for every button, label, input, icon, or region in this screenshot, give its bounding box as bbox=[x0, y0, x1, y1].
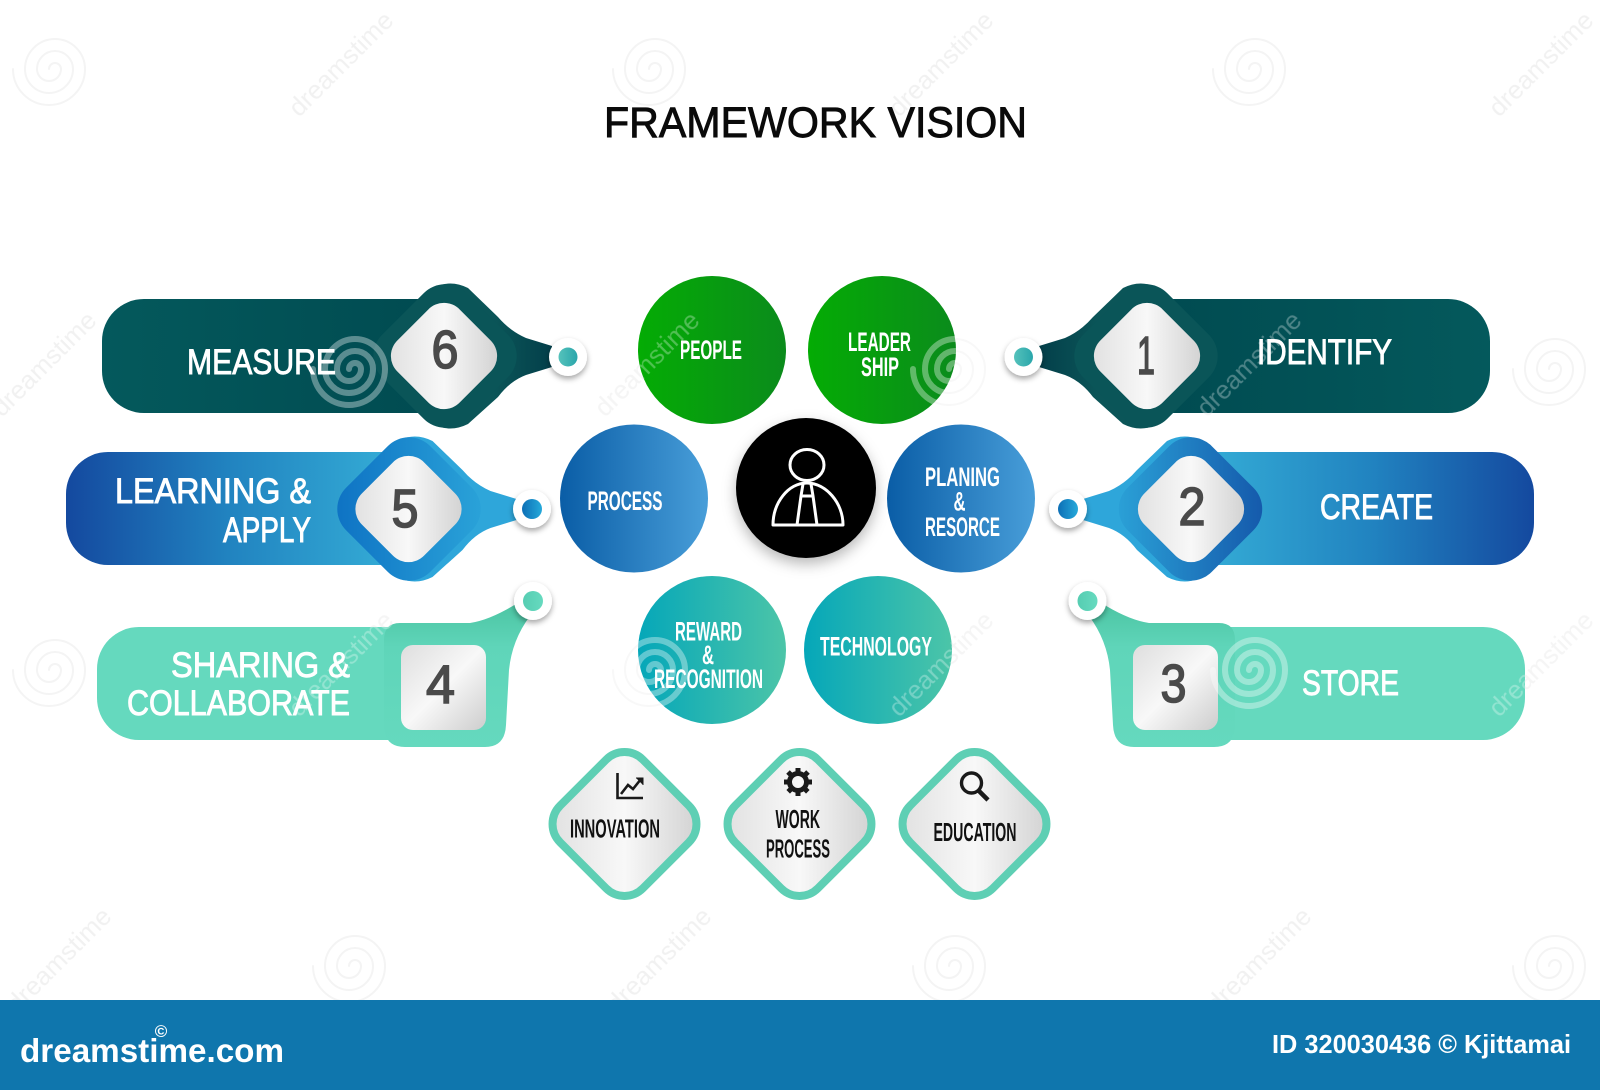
bar 4 bbox=[97, 627, 437, 740]
circle reward and recognition: REWARD bbox=[675, 616, 742, 646]
background watermark: dreamstime bbox=[600, 901, 717, 1018]
label innovation: INNOVATION bbox=[570, 814, 660, 844]
diamond 1 bbox=[1085, 294, 1209, 418]
circle planing and resorce bbox=[887, 424, 1035, 572]
background watermark: dreamstime bbox=[882, 5, 999, 122]
label work: WORK bbox=[776, 804, 820, 834]
diamond frame 6 bbox=[361, 272, 529, 440]
diamond frame 2 bbox=[1106, 425, 1275, 593]
node 2 bbox=[1049, 490, 1087, 528]
tail 5 bbox=[386, 436, 516, 582]
node 4 bbox=[514, 582, 552, 620]
node 5 bbox=[513, 490, 551, 528]
bar 3 bbox=[1185, 627, 1525, 740]
background watermark: dreamstime bbox=[282, 5, 399, 122]
tag 3 bbox=[1089, 604, 1235, 747]
diamond frame 1 bbox=[1062, 272, 1230, 440]
footer credit: ID 320030436 © Kjittamai bbox=[1272, 1029, 1571, 1059]
label identify: IDENTIFY bbox=[1257, 333, 1392, 372]
bar 1 bbox=[1130, 299, 1490, 413]
node 6 bbox=[549, 338, 587, 376]
title: FRAMEWORK VISION bbox=[604, 99, 1027, 147]
label learning: LEARNING & bbox=[115, 472, 311, 511]
circle technology: TECHNOLOGY bbox=[820, 632, 932, 662]
panel: step 5 learning and apply bbox=[66, 425, 551, 593]
diamond 6 bbox=[382, 294, 506, 418]
label education: EDUCATION bbox=[934, 817, 1016, 847]
square 3 bbox=[1133, 645, 1218, 730]
diamond education bbox=[892, 741, 1057, 907]
circle people bbox=[638, 276, 786, 424]
number 1: 1 bbox=[1137, 326, 1155, 386]
background watermark: dreamstime bbox=[588, 305, 705, 422]
panel: step 1 identify bbox=[1004, 272, 1490, 440]
background watermark: dreamstime bbox=[1482, 605, 1599, 722]
panel: step 6 measure bbox=[102, 272, 587, 440]
background watermark: dreamstime bbox=[882, 605, 999, 722]
footer logo: dreamstime.com bbox=[20, 1032, 284, 1069]
center black circle bbox=[736, 418, 876, 558]
footer logo mark: © bbox=[155, 1022, 168, 1041]
label sharing: SHARING & bbox=[171, 646, 350, 685]
number 4: 4 bbox=[426, 655, 455, 715]
square 4 bbox=[401, 645, 486, 730]
label measure: MEASURE bbox=[187, 343, 336, 382]
circle planing and resorce: & bbox=[954, 486, 966, 516]
icon: magnifier bbox=[962, 773, 988, 800]
diamond 5 bbox=[346, 447, 471, 571]
tail 1 bbox=[1039, 284, 1169, 428]
circle planing and resorce: PLANING bbox=[925, 462, 1000, 492]
footer bar bbox=[0, 1000, 1600, 1090]
background watermark: dreamstime bbox=[1200, 901, 1317, 1018]
circle process: PROCESS bbox=[588, 486, 662, 516]
background watermark: dreamstime bbox=[0, 901, 117, 1018]
number 6: 6 bbox=[432, 320, 458, 380]
icon: person with tie bbox=[773, 450, 843, 525]
label apply: APPLY bbox=[223, 511, 311, 550]
label process: PROCESS bbox=[766, 834, 830, 864]
diamond 2 bbox=[1129, 447, 1253, 571]
background watermark: dreamstime bbox=[1190, 305, 1307, 422]
foreground watermark: dreamstime bbox=[282, 605, 399, 722]
panel: step 4 sharing and collaborate bbox=[97, 582, 552, 747]
circle people: PEOPLE bbox=[680, 335, 742, 365]
number 2: 2 bbox=[1178, 477, 1206, 537]
foreground watermark: dreamstime bbox=[1482, 605, 1599, 722]
circle leadership: SHIP bbox=[861, 352, 899, 382]
bar 5 bbox=[66, 452, 426, 565]
circle leadership: LEADER bbox=[848, 327, 911, 357]
circle process bbox=[560, 424, 708, 572]
number 5: 5 bbox=[392, 479, 418, 539]
bar 6 bbox=[102, 299, 462, 413]
circle technology bbox=[804, 576, 952, 724]
label store: STORE bbox=[1302, 664, 1399, 703]
foreground watermark: dreamstime bbox=[588, 305, 705, 422]
panel: step 2 create bbox=[1049, 425, 1534, 593]
node 1 bbox=[1004, 338, 1042, 376]
node 3 bbox=[1068, 582, 1106, 620]
circle reward and recognition bbox=[638, 576, 786, 724]
panel: bottom diamonds bbox=[542, 741, 1057, 907]
tail 6 bbox=[422, 284, 552, 428]
number 3: 3 bbox=[1160, 654, 1186, 714]
background watermark: dreamstime bbox=[282, 605, 399, 722]
icon: growth chart bbox=[618, 773, 643, 798]
circle reward and recognition: & bbox=[702, 640, 714, 670]
diamond work process bbox=[717, 741, 882, 907]
tag 4 bbox=[384, 604, 530, 747]
circle planing and resorce: RESORCE bbox=[925, 512, 1000, 542]
diamond innovation bbox=[542, 741, 707, 907]
foreground watermark bbox=[282, 305, 1599, 722]
panel: step 3 store bbox=[1068, 582, 1525, 747]
icon: gear bbox=[784, 768, 812, 796]
panel: central circle cluster bbox=[560, 276, 1035, 724]
background watermark: dreamstime bbox=[1482, 5, 1599, 122]
label collaborate: COLLABORATE bbox=[127, 684, 350, 723]
foreground watermark: dreamstime bbox=[1190, 305, 1307, 422]
circle reward and recognition: RECOGNITION bbox=[654, 664, 763, 694]
circle leadership bbox=[808, 276, 956, 424]
bar 2 bbox=[1174, 452, 1534, 565]
label create: CREATE bbox=[1320, 488, 1433, 527]
diamond frame 5 bbox=[325, 425, 493, 593]
tail 2 bbox=[1083, 436, 1213, 582]
foreground watermark: dreamstime bbox=[882, 605, 999, 722]
